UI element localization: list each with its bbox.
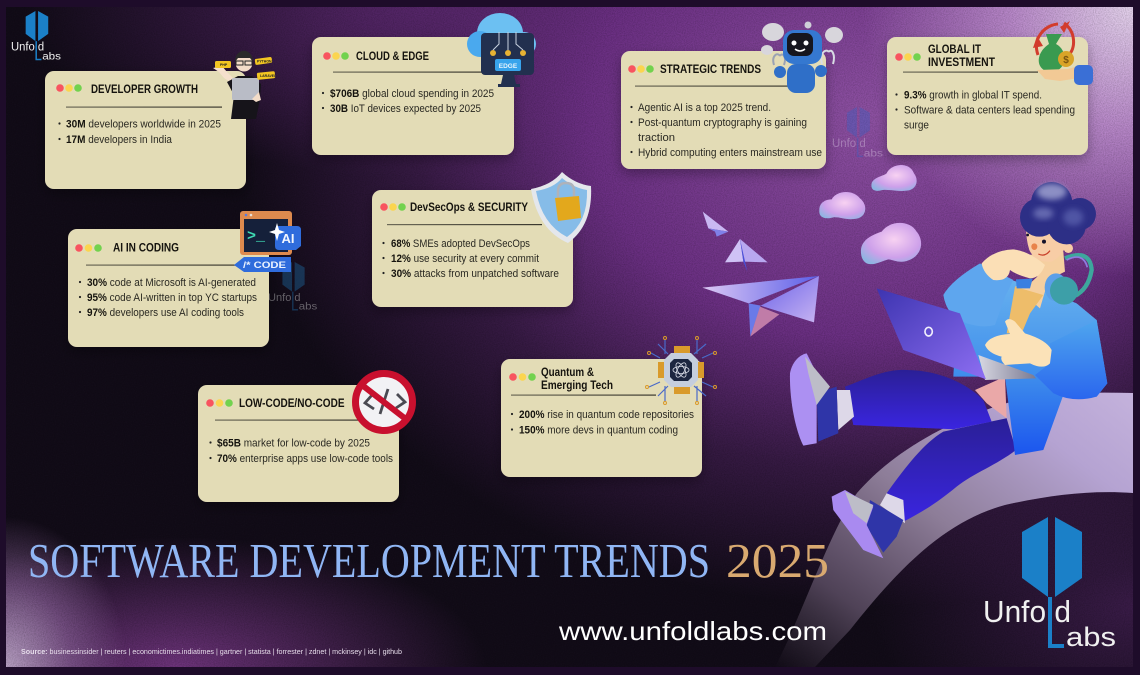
text: AI bullets — [79, 277, 257, 319]
panel: strategic trends — [621, 51, 826, 169]
heading: DevSecOps and security: DevSecOps & SECURITY — [410, 202, 528, 214]
icon: AI code terminal: /* CODE — [243, 260, 286, 270]
hair — [1020, 182, 1096, 244]
text: cloud bullets: 30B IoT devices expected by 2025 — [330, 103, 481, 115]
text: investment bullets: 9.3% growth in global IT spend. — [904, 90, 1042, 102]
icon: security shield — [531, 172, 591, 243]
watermark logo: centre left: abs — [299, 302, 317, 313]
text: investment bullets: surge — [904, 120, 929, 132]
curved swoosh band — [775, 393, 1133, 667]
text: security bullets: 68% SMEs adopted DevSecOps — [391, 238, 530, 250]
panel: AI in coding — [68, 229, 269, 347]
icon: developer with laptop: LARAVEL — [260, 74, 277, 78]
icon: edge cloud monitor: EDGE — [499, 63, 518, 70]
heading: strategic trends: STRATEGIC TRENDS — [660, 64, 761, 76]
legs and shoes — [790, 353, 1016, 558]
panel: developer growth — [45, 71, 246, 189]
watermark logo: centre left: Unfo d — [268, 292, 301, 304]
heading: developer growth: DEVELOPER GROWTH — [91, 84, 198, 96]
watermark logo: upper right: Unfo d — [832, 136, 866, 150]
title: SOFTWARE DEVELOPMENT TRENDS — [28, 533, 710, 588]
logo: bottom right — [983, 517, 1116, 652]
logo: bottom right: abs — [1066, 622, 1116, 652]
watermark logo: upper right: abs — [864, 148, 883, 159]
text: AI bullets: 95% code AI-written in top YC startups — [87, 292, 257, 304]
text: strategic bullets: Post-quantum cryptography is gaining — [638, 117, 807, 129]
text: low-code bullets — [209, 438, 393, 465]
text: low-code bullets: 70% enterprise apps use low-code tools — [217, 453, 393, 465]
shirt — [1007, 287, 1043, 333]
text: quantum bullets: 150% more devs in quantum coding — [519, 424, 678, 436]
face — [1026, 227, 1067, 262]
icon: edge cloud monitor — [467, 13, 536, 87]
panel: global IT investment — [887, 37, 1088, 155]
heading: quantum and emerging tech: Quantum & — [541, 367, 594, 379]
raised sleeve — [943, 263, 1013, 326]
panel: DevSecOps and security — [372, 190, 573, 307]
text: cloud bullets: $706B global cloud spending in 2025 — [330, 88, 494, 100]
text: security bullets: 30% attacks from unpatched software — [391, 268, 559, 280]
icon: paper planes — [702, 212, 819, 337]
website url: www.unfoldlabs.com — [558, 616, 827, 646]
text: cloud bullets — [322, 88, 494, 115]
icon: money bag in hand — [1033, 21, 1093, 85]
title: 2025 — [726, 533, 829, 588]
forearm and hand — [985, 319, 1107, 399]
heading: global IT investment: GLOBAL IT — [928, 44, 981, 56]
text: investment bullets — [895, 90, 1075, 132]
text: AI bullets: 97% developers use AI coding tools — [87, 307, 244, 319]
text: AI bullets: 30% code at Microsoft is AI-generated — [87, 277, 256, 289]
jacket — [953, 277, 1107, 455]
heading: global IT investment: INVESTMENT — [928, 57, 995, 69]
icon: no code sign — [356, 374, 412, 430]
text: strategic bullets: Hybrid computing enters mainstream use — [638, 147, 822, 159]
logo: bottom right: Unfo d — [983, 594, 1071, 629]
text: investment bullets: Software & data centers lead spending — [904, 104, 1075, 116]
logo: top left: Unfo d — [11, 40, 44, 53]
text: strategic bullets — [630, 102, 822, 159]
text: developer growth bullets — [58, 118, 221, 146]
icon: robot — [761, 22, 843, 93]
icon: AI code terminal: >_ — [247, 228, 266, 245]
icon: developer with laptop: PHP — [220, 63, 228, 67]
logo: top left — [11, 11, 61, 63]
icon: developer with laptop: PYTHON — [257, 60, 272, 64]
logo: top left: abs — [42, 52, 61, 63]
heading: quantum and emerging tech: Emerging Tech — [541, 380, 613, 392]
heading: cloud and edge: CLOUD & EDGE — [356, 51, 429, 63]
panel: low-code no-code — [198, 385, 399, 502]
heading: AI in coding: AI IN CODING — [113, 242, 179, 254]
icon: clouds — [819, 165, 921, 264]
text: developer growth bullets: 30M developers worldwide in 2025 — [66, 118, 221, 130]
icon: AI code terminal: AI — [282, 231, 294, 246]
text: security bullets: 12% use security at every commit — [391, 253, 539, 265]
icon: AI code terminal — [234, 211, 301, 272]
heading: low-code no-code: LOW-CODE/NO-CODE — [239, 398, 345, 410]
panel: quantum and emerging tech — [501, 359, 702, 477]
panel: cloud and edge — [312, 37, 514, 155]
text: developer growth bullets: 17M developers in India — [66, 134, 173, 146]
headphones — [1045, 255, 1092, 305]
source line: Source: businessinsider | reuters | economictimes.indiatimes | gartner | statista | forrester | zdnet | mckinsey | idc | github — [21, 647, 402, 656]
heading: global IT investment — [928, 44, 995, 69]
text: strategic bullets: Agentic AI is a top 2025 trend. — [638, 102, 771, 114]
upper body — [943, 182, 1107, 455]
text: low-code bullets: $65B market for low-code by 2025 — [217, 438, 370, 450]
text: quantum bullets: 200% rise in quantum code repositories — [519, 409, 694, 421]
icon: developer with laptop — [213, 51, 277, 119]
chin hand — [982, 249, 1045, 280]
icon: money bag in hand: $ — [1063, 55, 1069, 66]
text: security bullets — [382, 238, 559, 280]
watermark logo: upper right — [832, 107, 883, 159]
text: quantum bullets — [511, 409, 694, 436]
neck — [1015, 252, 1065, 308]
text: strategic bullets: traction — [638, 132, 675, 144]
watermark logo: centre left — [268, 262, 317, 313]
keyboard — [978, 355, 1036, 380]
heading: quantum and emerging tech — [541, 367, 613, 392]
icon: quantum chip — [646, 336, 716, 404]
laptop lid — [877, 288, 986, 379]
illustration: person with laptop — [790, 182, 1107, 558]
